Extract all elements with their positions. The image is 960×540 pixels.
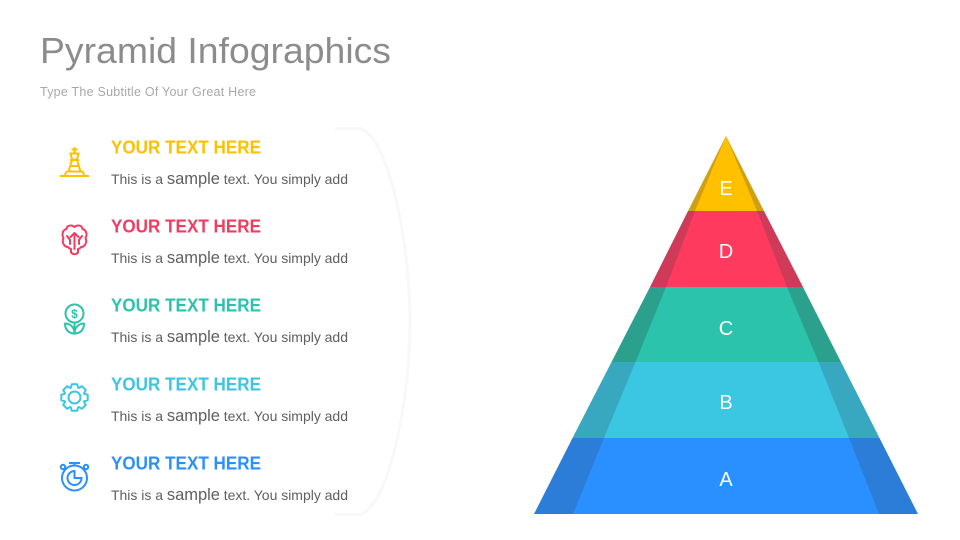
icon: chess king (60, 147, 89, 176)
body text: This is a sample text. You simply add (111, 170, 348, 188)
layer C (612, 287, 841, 362)
icon: brain bulb (62, 225, 86, 254)
title: Pyramid Infographics (40, 30, 391, 71)
layer B (572, 362, 880, 438)
list item: blue (61, 452, 348, 504)
heading: YOUR TEXT HERE (111, 216, 261, 236)
icon: dollar sign: $ (71, 307, 78, 321)
list item: cyan (61, 374, 348, 425)
heading: YOUR TEXT HERE (111, 294, 261, 316)
layer A (534, 438, 918, 514)
layer C: C (719, 318, 733, 340)
heading: YOUR TEXT HERE (111, 452, 261, 474)
body text: This is a sample text. You simply add (111, 328, 348, 346)
panel: list background (335, 128, 410, 514)
heading: YOUR TEXT HERE (111, 136, 261, 158)
list item: yellow (60, 136, 348, 188)
body text: This is a sample text. You simply add (111, 486, 348, 504)
icon: gear (61, 384, 88, 411)
icon: stopwatch (61, 463, 88, 490)
layer A: A (719, 469, 733, 491)
icon: money plant (65, 304, 84, 334)
body text: This is a sample text. You simply add (111, 407, 348, 425)
layer E (688, 136, 764, 211)
list item: green (65, 294, 348, 346)
layer D: D (719, 241, 733, 263)
body text: This is a sample text. You simply add (111, 249, 348, 267)
pyramid chart (534, 136, 918, 514)
list item: red (62, 216, 348, 267)
layer E: E (719, 178, 733, 200)
layer B: B (719, 392, 733, 414)
heading: YOUR TEXT HERE (111, 374, 261, 394)
layer D (650, 211, 803, 287)
subtitle: Type The Subtitle Of Your Great Here (40, 85, 256, 99)
